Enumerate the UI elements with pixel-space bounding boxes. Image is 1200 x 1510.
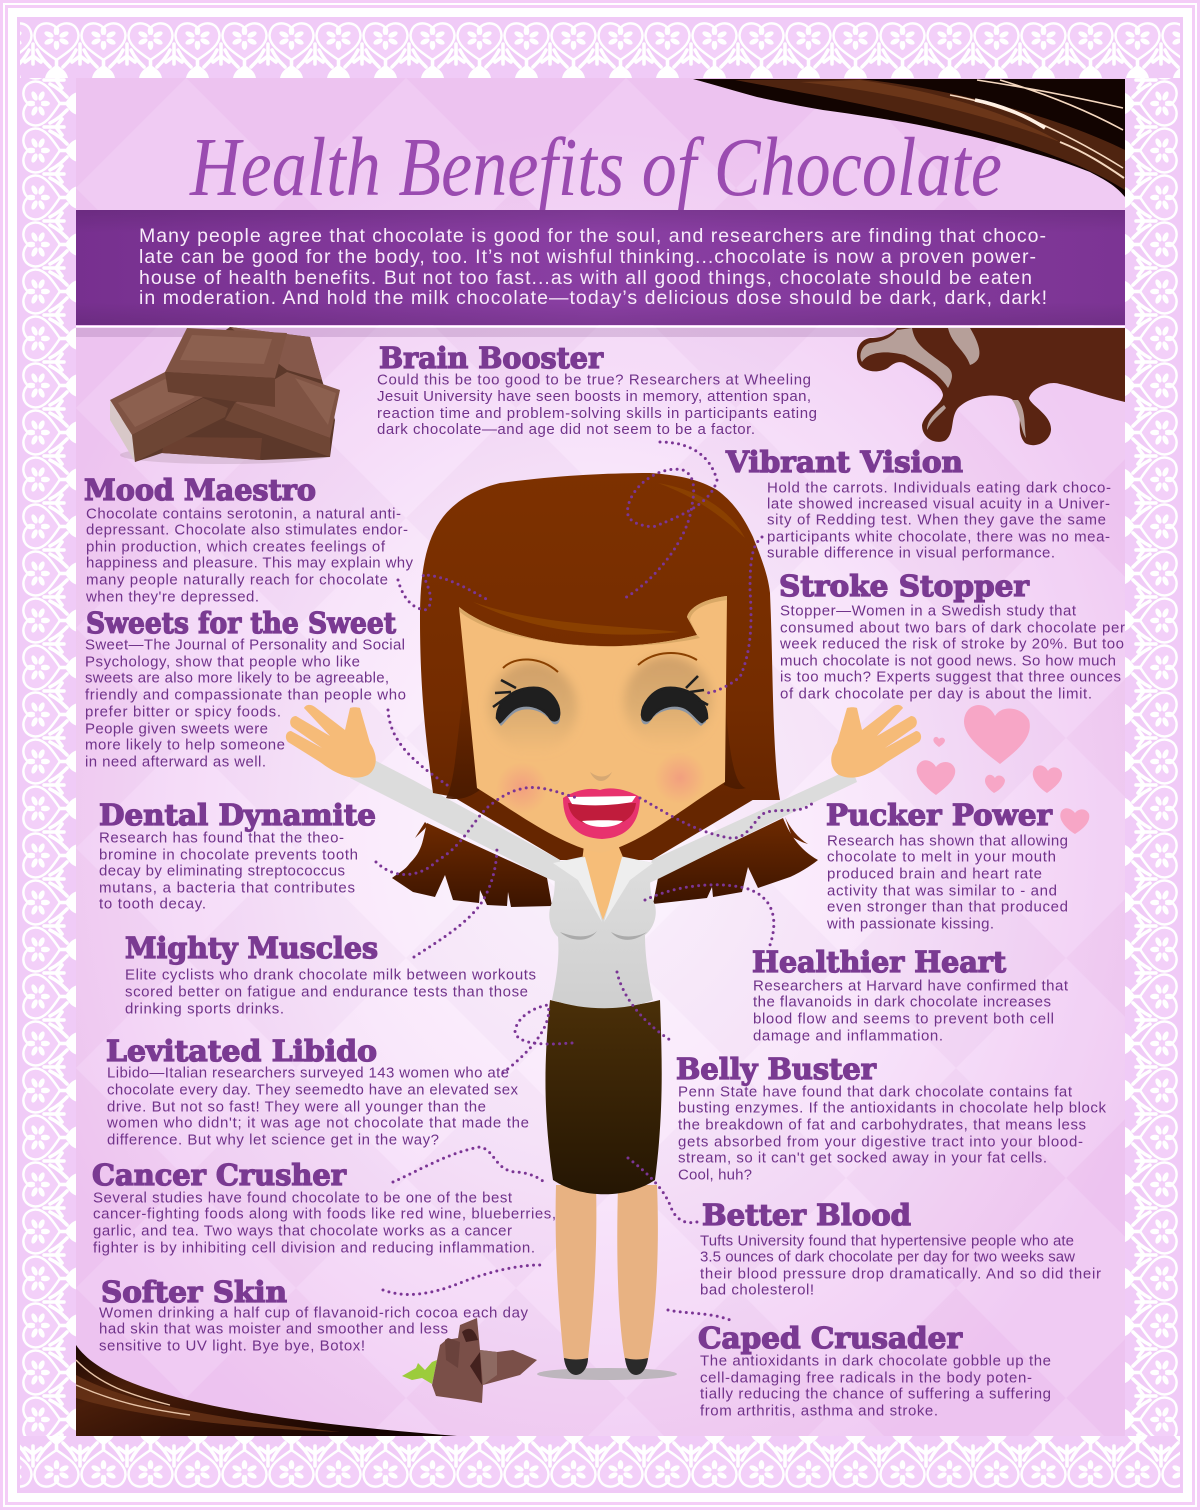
background panel [76, 78, 1125, 1436]
cheek right [654, 752, 706, 804]
bust shadows [560, 931, 647, 940]
section: Mood Maestro: phin production, which creates feelings of [86, 538, 386, 556]
dotted connector: Vibrant Vision [705, 537, 762, 693]
section: Mighty Muscles: Mighty Muscles [125, 931, 378, 965]
section: Better Blood: 3.5 ounces of dark chocolate per day for two weeks saw [700, 1248, 1075, 1266]
upper hair [420, 473, 780, 800]
section: Brain Booster [377, 341, 817, 438]
torso shirt [549, 855, 656, 1008]
dotted connector: Cancer Crusher [393, 1147, 545, 1183]
section: Levitated Libido: difference. But why let science get in the way? [107, 1132, 439, 1148]
section: Dental Dynamite: Research has found that the theo- [99, 830, 344, 846]
intro banner [76, 210, 1125, 337]
section: Caped Crusader: cell-damaging free radicals in the body poten- [700, 1370, 1032, 1386]
brows [503, 653, 697, 672]
eye right shadow line [641, 692, 706, 726]
icon: chocolate curls with mint [402, 1318, 537, 1403]
section: Dental Dynamite: mutans, a bacteria that contributes [99, 880, 355, 896]
section: Caped Crusader: Caped Crusader [698, 1321, 963, 1355]
section: Brain Booster: dark chocolate—and age did not seem to be a factor. [377, 421, 755, 438]
section: Belly Buster: busting enzymes. If the antioxidants in chocolate help block [678, 1100, 1106, 1116]
section: Pucker Power: with passionate kissing. [826, 916, 994, 932]
section: Dental Dynamite [99, 798, 376, 912]
section: Pucker Power: even stronger than that produced [827, 898, 1068, 916]
section: Healthier Heart: Researchers at Harvard have confirmed that [753, 978, 1069, 994]
section: Vibrant Vision: Hold the carrots. Individuals eating dark choco- [767, 480, 1111, 496]
dotted connector: Better Blood [628, 1158, 697, 1223]
lower hair right flick [785, 817, 808, 844]
section: Stroke Stopper: consumed about two bars of dark chocolate per [780, 620, 1125, 636]
section: Mood Maestro: many people naturally reach for chocolate [86, 572, 388, 588]
icon: chocolate splash [857, 328, 1125, 445]
dotted connector: Belly Buster [617, 972, 670, 1040]
dotted connector: Caped Crusader [668, 1310, 730, 1320]
section: Caped Crusader: from arthritis, asthma and stroke. [700, 1402, 938, 1420]
section: Vibrant Vision: late showed increased visual acuity in a Univer- [767, 496, 1110, 512]
section: Pucker Power [826, 798, 1068, 932]
section: Pucker Power: produced brain and heart rate [827, 866, 1042, 882]
section: Softer Skin: sensitive to UV light. Bye bye, Botox! [99, 1338, 365, 1354]
section: Sweets for the Sweet: in need afterward as well. [85, 754, 266, 770]
section: Sweets for the Sweet: Psychology, show that people who like [85, 654, 360, 670]
hair highlight [473, 483, 745, 635]
section: Softer Skin [99, 1275, 528, 1354]
lower hair right [653, 818, 818, 904]
section: Mood Maestro: depressant. Chocolate also stimulates endor- [86, 522, 408, 538]
section: Sweets for the Sweet: Sweets for the Sweet [86, 606, 397, 640]
figure: woman character [286, 473, 921, 1380]
section: Softer Skin: Women drinking a half cup of flavanoid-rich cocoa each day [99, 1304, 528, 1322]
eye left shadow line [498, 692, 560, 726]
section: Vibrant Vision [725, 445, 1111, 562]
section: Pucker Power: activity that was similar to - and [827, 882, 1057, 900]
section: Cancer Crusher: Several studies have found chocolate to be one of the best [93, 1190, 513, 1206]
dotted connector: Softer Skin [383, 1265, 540, 1294]
section: Mood Maestro: happiness and pleasure. This may explain why [86, 554, 414, 572]
section: Healthier Heart: the flavanoids in dark chocolate increases [753, 994, 1051, 1010]
face [459, 596, 727, 853]
eye left [493, 680, 559, 722]
section: Caped Crusader: tially reducing the chance of suffering a suffering [700, 1386, 1051, 1402]
section: Stroke Stopper: of dark chocolate per day is about the limit. [780, 686, 1092, 702]
section: Dental Dynamite: to tooth decay. [99, 896, 206, 912]
section: Mood Maestro: Mood Maestro [84, 473, 316, 507]
mouth [563, 788, 640, 839]
section: Belly Buster: the breakdown of fat and carbohydrates, that means less [678, 1116, 1086, 1134]
section: Mood Maestro [84, 473, 414, 606]
intro banner: house of health benefits. But not too fast...as with all good things, chocolate should be eaten [139, 267, 1032, 289]
dotted connector: Pucker Power [640, 798, 815, 838]
section: Vibrant Vision: sity of Redding test. When they gave the same [767, 512, 1106, 528]
section: Stroke Stopper: Stroke Stopper [779, 569, 1030, 603]
section: Brain Booster: Jesuit University have seen boosts in memory, attention span, [377, 388, 811, 405]
nose [590, 772, 612, 781]
section: Pucker Power: chocolate to melt in your mouth [827, 848, 1056, 866]
section: Brain Booster: Could this be too good to be true? Researchers at Wheeling [377, 372, 811, 388]
teeth [568, 796, 636, 827]
skirt [545, 1000, 662, 1194]
section: Vibrant Vision: participants white chocolate, there was no mea- [767, 528, 1110, 546]
section: Stroke Stopper: Stopper—Women in a Swedish study that [780, 602, 1077, 620]
arms [350, 750, 857, 885]
eye right [642, 676, 708, 722]
dotted connector: Mighty Muscles [414, 845, 497, 957]
section: Levitated Libido [106, 1034, 529, 1148]
fringe shadow [459, 596, 727, 646]
section: Better Blood: bad cholesterol! [700, 1282, 814, 1298]
section: Sweets for the Sweet: sweets are also more likely to be agreeable, [85, 670, 389, 686]
section: Caped Crusader [698, 1321, 1051, 1420]
intro banner: late can be good for the body, too. It’s not wishful thinking...chocolate is now a proven power- [139, 246, 1036, 268]
section: Healthier Heart [752, 945, 1069, 1044]
shoes [564, 1358, 648, 1375]
hand right [831, 705, 921, 778]
neck and chest [582, 845, 625, 920]
section: Vibrant Vision: Vibrant Vision [725, 445, 963, 479]
section: Better Blood: their blood pressure drop dramatically. And so did their [700, 1266, 1101, 1282]
intro banner: in moderation. And hold the milk chocolate—today’s delicious dose should be dark, dark, dark! [139, 287, 1047, 309]
section: Caped Crusader: The antioxidants in dark chocolate gobble up the [700, 1352, 1051, 1370]
hand left [286, 705, 376, 778]
eye shadow right [624, 656, 712, 748]
section: Dental Dynamite: decay by eliminating streptococcus [99, 862, 345, 880]
hair behind neck [433, 785, 778, 860]
section: Sweets for the Sweet: prefer bitter or spicy foods. [85, 704, 281, 720]
eye shadows [489, 662, 577, 754]
section: Mood Maestro: Chocolate contains serotonin, a natural anti- [86, 506, 401, 522]
section: Sweets for the Sweet: more likely to help someone [85, 736, 285, 754]
cheeks [496, 762, 548, 814]
icon: chocolate bars [110, 327, 340, 464]
section: Softer Skin: Softer Skin [101, 1275, 287, 1309]
section: Better Blood: Better Blood [702, 1198, 911, 1232]
section: Cancer Crusher [92, 1158, 556, 1256]
section: Sweets for the Sweet: friendly and compassionate than people who [85, 686, 406, 704]
section: Belly Buster: Penn State have found that dark chocolate contains fat [678, 1084, 1073, 1100]
section: Mighty Muscles: drinking sports drinks. [125, 1000, 284, 1018]
chocolate swoosh top right [693, 79, 1125, 197]
legs [556, 1185, 658, 1360]
section: Stroke Stopper: much chocolate is not good news. So how much [780, 652, 1116, 670]
section: Belly Buster: Cool, huh? [678, 1166, 752, 1184]
section: Healthier Heart: Healthier Heart [752, 945, 1007, 979]
section: Levitated Libido: chocolate every day. They seemedto have an elevated sex [107, 1082, 518, 1098]
section: Vibrant Vision: surable difference in visual performance. [767, 544, 1055, 562]
section: Belly Buster: gets absorbed from your digestive tract into your blood- [678, 1134, 1083, 1150]
chocolate swoosh bottom left [76, 1345, 457, 1436]
dotted connector: Mood Maestro [398, 575, 488, 610]
section: Brain Booster: reaction time and problem-solving skills in participants eating [377, 405, 817, 422]
section: Stroke Stopper [779, 569, 1125, 702]
section: Pucker Power: Research has shown that allowing [827, 832, 1068, 850]
section: Cancer Crusher: cancer-fighting foods along with foods like red wine, blueberries, [93, 1206, 556, 1222]
dotted connector: Dental Dynamite [376, 788, 578, 875]
section: Pucker Power: Pucker Power [826, 798, 1053, 832]
section: Cancer Crusher: fighter is by inhibiting cell division and reducing inflammation. [93, 1240, 535, 1256]
section: Levitated Libido: drive. But not so fast! They were all younger than the [107, 1098, 486, 1116]
title: Health Benefits of Chocolate [189, 120, 1002, 213]
section: Levitated Libido: Levitated Libido [106, 1034, 377, 1068]
section: Sweets for the Sweet: People given sweets were [85, 720, 268, 738]
collar [553, 857, 653, 922]
section: Cancer Crusher: Cancer Crusher [92, 1158, 347, 1192]
dotted connector: Healthier Heart [645, 885, 774, 945]
section: Mighty Muscles [125, 931, 536, 1018]
section: Healthier Heart: blood flow and seems to prevent both cell [753, 1010, 1054, 1028]
section: Mighty Muscles: scored better on fatigue and endurance tests than those [125, 984, 528, 1000]
section: Dental Dynamite: bromine in chocolate prevents tooth [99, 846, 358, 864]
section: Levitated Libido: Libido—Italian researchers surveyed 143 women who ate [107, 1064, 509, 1082]
intro banner: Many people agree that chocolate is good for the soul, and researchers are finding that choco- [139, 225, 1046, 247]
section: Belly Buster: Belly Buster [676, 1052, 877, 1086]
shadow under feet [537, 1368, 677, 1380]
lower hair left [392, 823, 552, 907]
section: Sweets for the Sweet: Sweet—The Journal of Personality and Social [85, 636, 405, 654]
section: Levitated Libido: women who didn't; it was age not chocolate that made the [106, 1114, 529, 1132]
section: Healthier Heart: damage and inflammation. [753, 1028, 943, 1044]
section: Stroke Stopper: is too much? Experts suggest that three ounces [780, 668, 1121, 686]
section: Softer Skin: had skin that was moister and smoother and less [99, 1320, 448, 1338]
icon: hearts [917, 705, 1089, 834]
section: Dental Dynamite: Dental Dynamite [99, 798, 376, 832]
section: Belly Buster: stream, so it can't get socked away in your fat cells. [678, 1150, 1047, 1166]
dotted connector: Levitated Libido [500, 1005, 572, 1075]
section: Better Blood: Tufts University found that hypertensive people who ate [700, 1232, 1074, 1250]
dotted connector: Brain Booster [625, 442, 717, 598]
section: Sweets for the Sweet [85, 606, 406, 770]
section: Brain Booster: Brain Booster [379, 341, 604, 375]
section: Mood Maestro: when they're depressed. [85, 588, 259, 606]
section: Stroke Stopper: week reduced the risk of stroke by 20%. But too [779, 636, 1124, 652]
section: Belly Buster [676, 1052, 1106, 1184]
lower hair left flick [415, 822, 428, 838]
dotted connector: Sweets for the Sweet [388, 710, 450, 787]
section: Mighty Muscles: Elite cyclists who drank chocolate milk between workouts [125, 966, 536, 984]
hair tuck shadows [446, 680, 746, 799]
section: Cancer Crusher: garlic, and tea. Two ways that chocolate works as a cancer [93, 1222, 512, 1240]
section: Better Blood [700, 1198, 1101, 1298]
